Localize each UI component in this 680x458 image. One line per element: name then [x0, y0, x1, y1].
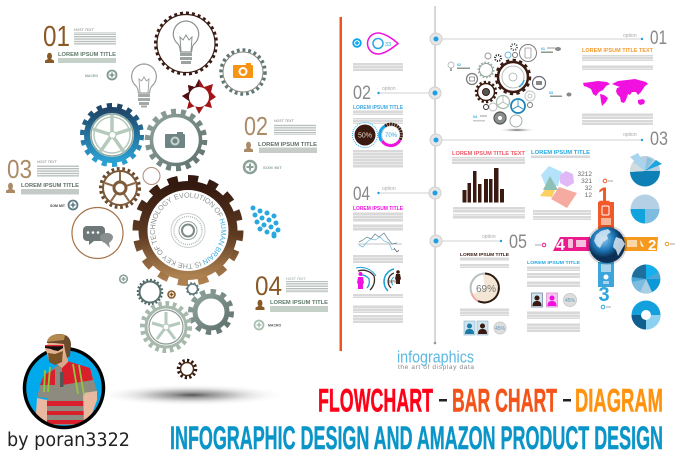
person gauges: 60%: [388, 279, 397, 284]
label block 03: LOREM IPSUM TITLE: [21, 183, 79, 189]
cross diagram with globe: [535, 179, 675, 309]
gray gear right: [190, 292, 232, 332]
panel: world map: [582, 48, 653, 125]
panel: 05 percent donut: LOREM IPSUM TITLE: [460, 252, 509, 257]
pie 1: [630, 153, 662, 187]
magenta teardrop: [368, 33, 398, 54]
label block 02: LOREM IPSUM TITLE: [258, 142, 317, 148]
author name: by poran3322: [7, 430, 130, 451]
panel: 05 percent donut: [460, 252, 509, 335]
label block 02: SOM MIT: [263, 165, 283, 170]
cluster labels: 02: [457, 63, 461, 67]
avatars: 45%: [565, 298, 576, 304]
cluster labels: [448, 47, 572, 122]
step numbers and options: 05: [509, 232, 527, 253]
panel: venn shapes: LOREM IPSUM TITLE: [531, 150, 591, 156]
percent 70: 70%: [385, 133, 398, 139]
cluster labels: 01: [541, 47, 545, 51]
numbers: 12: [585, 192, 592, 199]
donut 69: 69%: [476, 284, 496, 295]
gray camera gear: [148, 112, 204, 168]
thin ring: [143, 168, 160, 184]
arm 2: 2: [648, 237, 656, 254]
cluster labels: 04: [473, 115, 477, 119]
shadow under gears: [97, 384, 287, 406]
panel: world map: LOREM IPSUM TITLE TEXT: [582, 48, 653, 54]
label block 02: [244, 111, 317, 173]
label block 04: LOREM IPSUM TITLE: [270, 300, 328, 306]
step numbers and options: option: [623, 33, 637, 39]
blue wheel gear: [84, 107, 140, 163]
avatars: 45%: [495, 326, 506, 332]
headline: chart types: FLOWCHART: [318, 382, 433, 418]
section 02 title: LOREM IPSUM TITLE: [353, 105, 404, 111]
step numbers and options: 03: [650, 129, 668, 150]
step numbers and options: option: [623, 132, 637, 138]
person gauges: [356, 267, 401, 291]
brown spoked gear: [101, 169, 139, 207]
plus icon: [353, 39, 361, 47]
percent 70: [380, 124, 401, 146]
pie 4 donut: [632, 300, 660, 330]
headline: chart types: BAR CHART: [452, 382, 557, 418]
magenta map: [583, 79, 648, 106]
numbers: 3212: [578, 171, 592, 178]
magenta teardrop: 33: [385, 42, 391, 48]
panel: bar chart: LOREM IPSUM TITLE TEXT: [452, 151, 526, 157]
numbers: 321: [581, 178, 592, 185]
small plus icons: [120, 275, 175, 298]
step numbers and options: option: [482, 234, 496, 240]
pie charts: [630, 153, 662, 330]
label block 01: [43, 21, 116, 80]
gear: orange camera: [221, 50, 265, 94]
big gear with ring text: [132, 175, 244, 286]
pie 2: [630, 194, 660, 224]
label block 01: HOST TEXT: [74, 28, 95, 32]
label block 03: HOST TEXT: [37, 160, 58, 164]
label block 01: MACRO: [85, 74, 98, 78]
step numbers and options: [353, 28, 668, 253]
label block 04: 04: [255, 271, 282, 301]
gear: big light bulb: [156, 13, 216, 74]
numbers: [578, 171, 592, 199]
panel: bar chart: [452, 151, 526, 219]
line chart: [358, 233, 402, 252]
label block 04: MACRO: [268, 324, 281, 328]
orange divider: [340, 17, 342, 351]
arm 3: 3: [598, 284, 610, 306]
panel: 05 second column: [527, 260, 580, 332]
small gears cluster: [138, 280, 198, 304]
percent 50: [352, 122, 378, 148]
label block 03: 03: [7, 154, 32, 184]
label block 01: 01: [43, 21, 70, 53]
left panel: gear infographic: [6, 12, 328, 380]
label block 01: LOREM IPSUM TITLE: [58, 52, 116, 58]
panel: 05 second column: LOREM IPSUM TITLE: [527, 260, 580, 265]
label block 03: SOM MIT: [50, 204, 66, 208]
ring text: EVOLUTION OF HUMAN BRAIN IS THE KEY OF TECHNOLOGY: [150, 192, 226, 269]
bars: [462, 168, 504, 202]
arm 4: 4: [556, 237, 565, 254]
timeline end dots: [377, 38, 643, 242]
small dark gear: [178, 360, 196, 378]
small light bulb: [132, 64, 156, 108]
infographics logo: the art of display data: [398, 364, 474, 371]
panel: venn shapes: [531, 150, 592, 220]
arm 1: 1: [598, 183, 610, 208]
infographics logo: infographics: [397, 348, 474, 366]
chat bubbles circle: [72, 208, 123, 258]
numbers: 32: [585, 185, 592, 192]
central gears cluster: [448, 44, 572, 132]
cluster labels: 03: [549, 91, 553, 95]
step numbers and options: option: [382, 86, 396, 92]
step numbers and options: 02: [353, 83, 371, 104]
label block 04: [254, 271, 328, 330]
red star gear: [182, 79, 216, 114]
avatar: man with sunglasses: [24, 334, 104, 428]
label block 02: 02: [244, 111, 268, 141]
step numbers and options: 01: [650, 28, 667, 49]
pale wheel gear: [142, 304, 190, 350]
globe: [587, 225, 627, 265]
percent 50: 50%: [358, 132, 372, 140]
pie 3: [632, 264, 660, 294]
timeline: [353, 6, 668, 344]
timeline nodes: [429, 33, 442, 247]
label block 02: HOST TEXT: [274, 119, 295, 123]
section 04 title: LOREM IPSUM TITLE: [353, 206, 404, 212]
markers: [535, 179, 675, 309]
blue dots: [250, 206, 280, 238]
label block 04: HOST TEXT: [286, 277, 307, 281]
step numbers and options: option: [382, 186, 396, 192]
cluster shadow: [498, 128, 536, 132]
label block 03: [6, 154, 79, 210]
step numbers and options: 04: [353, 184, 370, 205]
headline: chart types: [318, 382, 663, 418]
column: intro teardrop and percentages: [352, 33, 404, 323]
